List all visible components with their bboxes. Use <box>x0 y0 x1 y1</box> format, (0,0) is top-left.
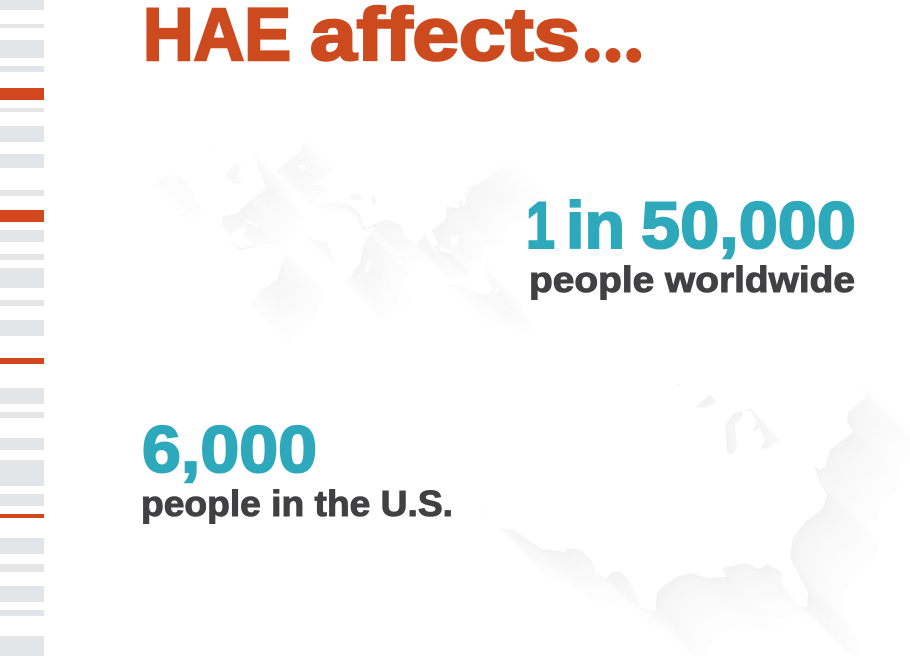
label: people worldwide: people worldwide <box>529 259 855 300</box>
U.S. map with long shadow <box>440 340 910 656</box>
title <box>143 0 644 79</box>
stripe column <box>0 0 44 656</box>
label: people in the U.S.: people in the U.S. <box>141 483 453 524</box>
stat: 1 in 50,000: 1 <box>526 188 555 262</box>
stat: 1 in 50,000 <box>526 188 856 262</box>
world map with long shadow <box>142 133 552 345</box>
stat: 1 in 50,000: 50,000 <box>641 188 856 262</box>
stat: 1 in 50,000: in <box>566 188 625 262</box>
stat: 6,000: 6,000 <box>142 412 317 486</box>
